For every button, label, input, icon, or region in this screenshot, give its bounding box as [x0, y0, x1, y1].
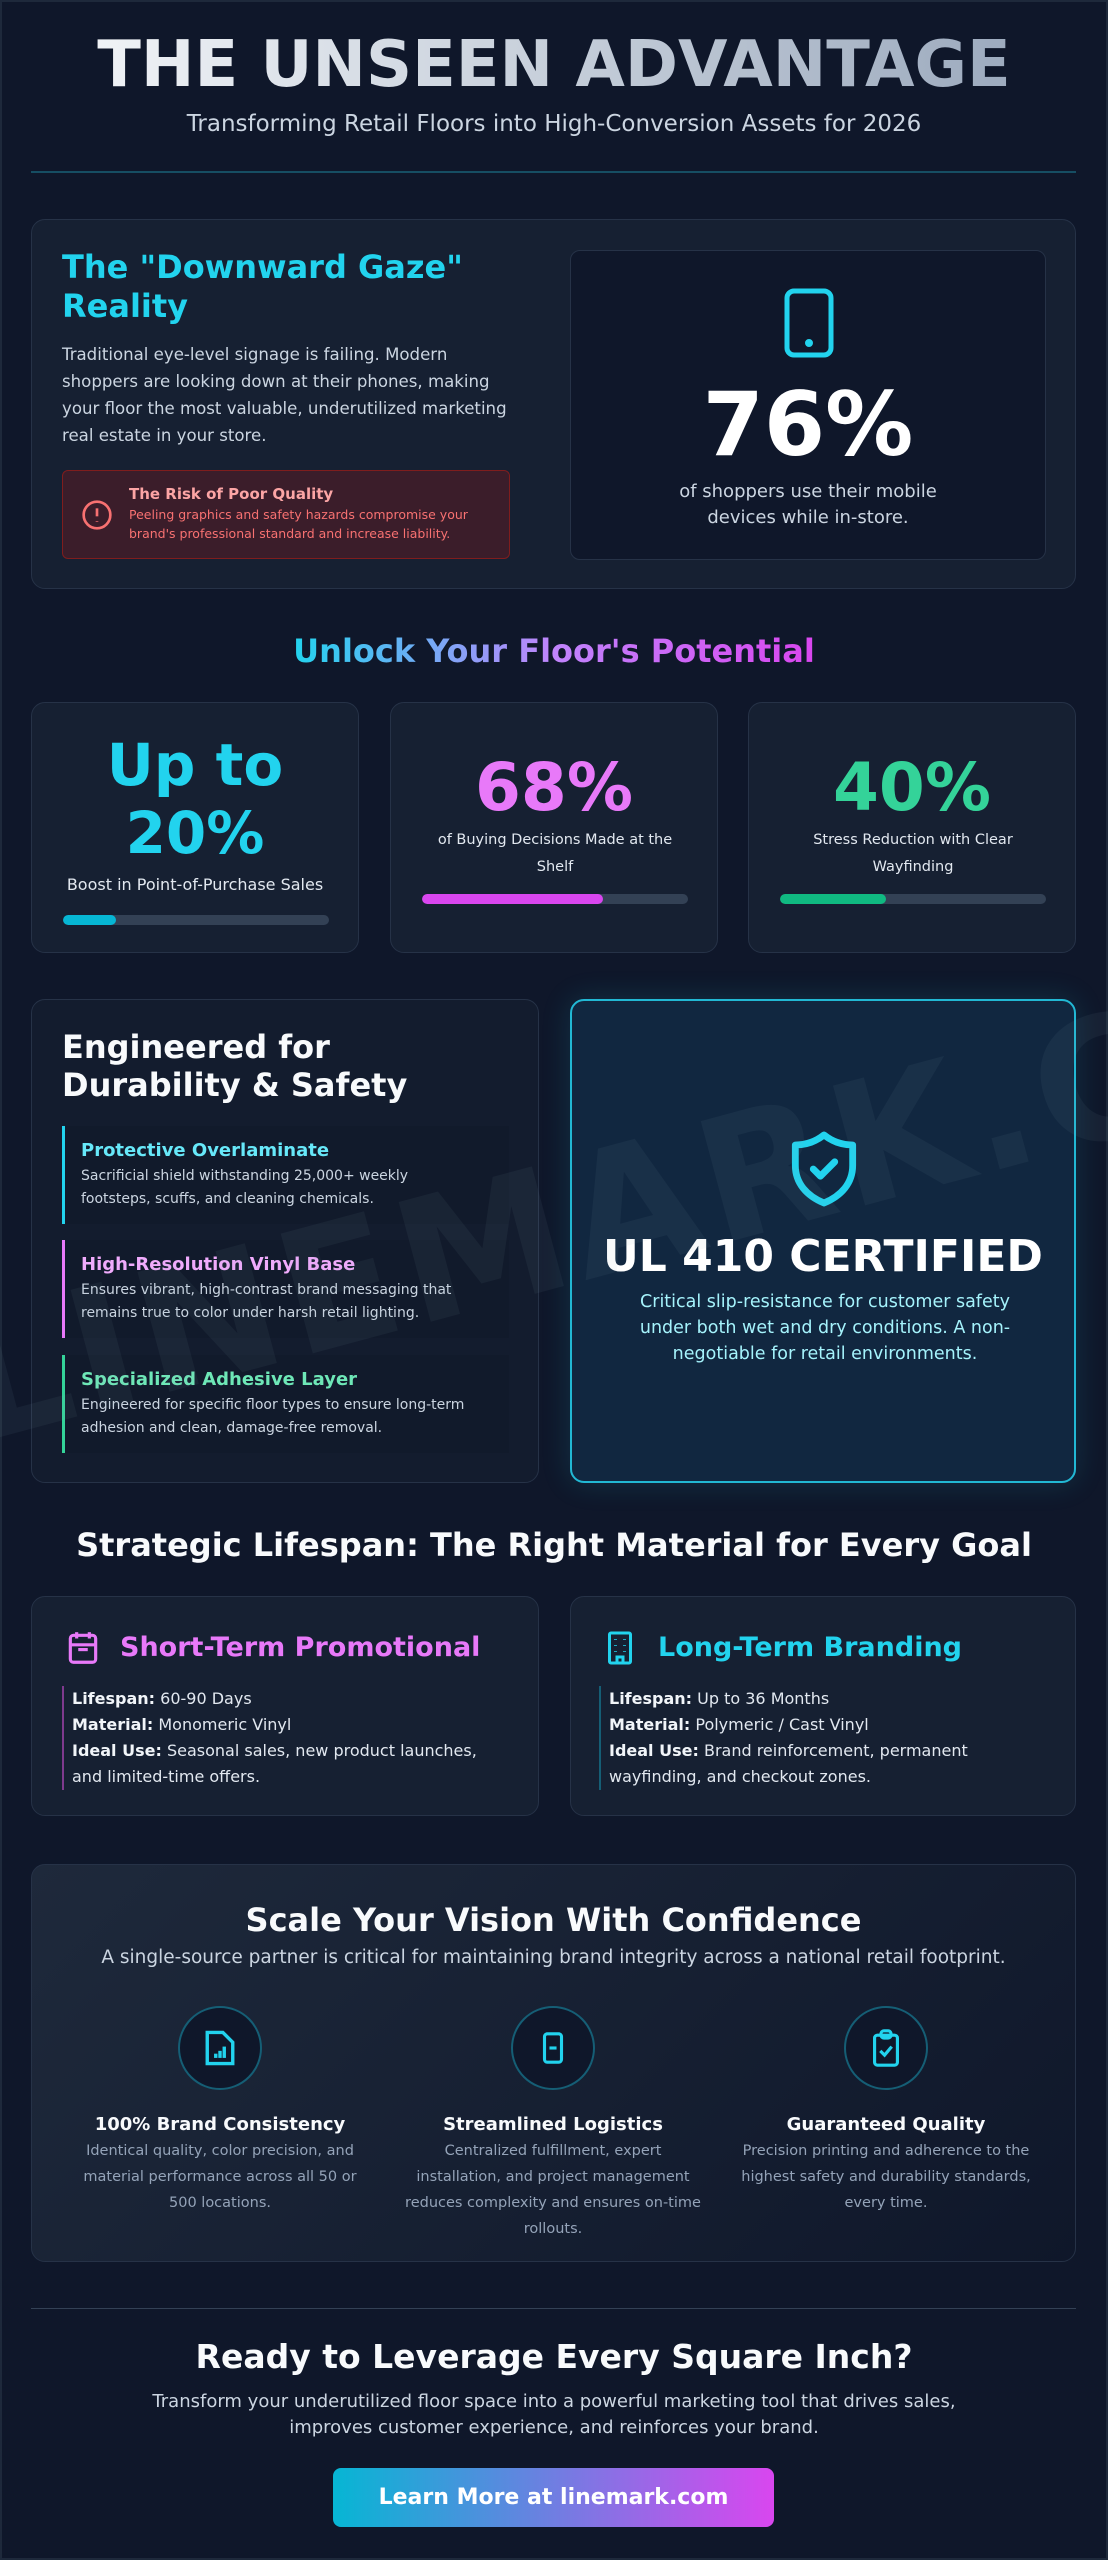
heading: downward gaze — [62, 248, 463, 325]
icon: file chart — [178, 2006, 262, 2090]
panel: downward gaze — [31, 219, 1076, 589]
heading: ready to leverage: Ready to Leverage Every Square Inch? — [196, 2337, 912, 2376]
icon: clipboard check — [844, 2006, 928, 2090]
details: short-term: Ideal Use: Seasonal sales, new product launches, and limited-time offers. — [72, 1741, 477, 1786]
stat card: 20%: 20% — [126, 799, 264, 867]
feature: brand consistency: 100% Brand Consistency — [95, 2114, 345, 2135]
title: THE UNSEEN ADVANTAGE — [97, 28, 1011, 102]
item: adhesive: Specialized Adhesive Layer — [81, 1369, 357, 1390]
text: UL 410 description: Critical slip-resistance for customer safety under both wet and dry conditions. A non-negotiable for retail environments. — [640, 1292, 1010, 1364]
item: vinyl base: Ensures vibrant, high-contrast brand messaging that remains true to color under harsh retail lighting. — [81, 1282, 451, 1321]
item: vinyl base: High-Resolution Vinyl Base — [81, 1254, 355, 1275]
heading: durability: Durability & Safety — [62, 1066, 407, 1104]
heading: durability: Engineered for — [62, 1028, 330, 1066]
heading: UL 410: UL 410 CERTIFIED — [603, 1231, 1043, 1282]
feature: guaranteed quality — [741, 2006, 1031, 2211]
stat card: 20%: Up to — [107, 731, 283, 799]
stat box: 76% — [570, 250, 1046, 560]
feature: logistics: Streamlined Logistics — [443, 2114, 663, 2135]
details: long-term: Lifespan: Up to 36 Months — [609, 1689, 829, 1708]
text: risk: The Risk of Poor Quality — [129, 485, 333, 503]
item: adhesive — [62, 1355, 509, 1453]
stat caption: devices while in-store. — [707, 507, 909, 528]
details: short-term: Lifespan: 60-90 Days — [72, 1689, 252, 1708]
panel: long-term — [570, 1596, 1076, 1816]
feature: brand consistency — [83, 2006, 357, 2211]
stat card: 40%: 40% — [833, 749, 991, 826]
panel: short-term — [31, 1596, 539, 1816]
text: scale subtitle: A single-source partner is critical for maintaining brand integrity across a national retail footprint. — [101, 1947, 1006, 1968]
callout: risk of poor quality — [62, 470, 510, 559]
heading: durability — [62, 1028, 407, 1104]
details: long-term — [599, 1686, 1029, 1790]
details: short-term: Material: Monomeric Vinyl — [72, 1715, 291, 1734]
feature: guaranteed quality: Precision printing and adherence to the highest safety and durability standards, every time. — [741, 2143, 1031, 2211]
text: downward gaze paragraph: Traditional eye-level signage is failing. Modern shoppers are looking down at their phones, making your floor the most valuable, underutilized marketing real estate in your store. — [62, 345, 507, 445]
stat caption: of shoppers use their mobile — [679, 481, 937, 502]
stat card: 20% — [31, 702, 359, 953]
subtitle: Transforming Retail Floors into High-Conversion Assets for 2026 — [187, 111, 921, 137]
item: vinyl base — [62, 1240, 509, 1338]
icon: shield — [792, 1132, 856, 1206]
icon: warning — [82, 500, 112, 530]
text: risk — [129, 485, 468, 541]
details: short-term — [62, 1686, 502, 1790]
heading: unlock potential: Unlock Your Floor's Potential — [293, 632, 815, 670]
stat card: 68% — [390, 702, 718, 953]
icon: building — [608, 1632, 632, 1664]
heading: strategic lifespan: Strategic Lifespan: The Right Material for Every Goal — [76, 1526, 1032, 1564]
details: long-term: Ideal Use: Brand reinforcement, permanent wayfinding, and checkout zones. — [609, 1741, 968, 1786]
panel: UL 410 certified — [570, 999, 1076, 1483]
text: risk: Peeling graphics and safety hazards compromise your brand's professional standard and increase liability. — [129, 507, 468, 541]
panel: durability — [31, 999, 539, 1483]
feature: guaranteed quality: Guaranteed Quality — [787, 2114, 985, 2135]
stat card: 40% — [748, 702, 1076, 953]
heading: short-term: Short-Term Promotional — [120, 1632, 480, 1663]
heading: downward gaze: Reality — [62, 287, 188, 325]
stat card: 40%: Stress Reduction with Clear Wayfinding — [813, 832, 1013, 875]
button: learn more — [333, 2468, 774, 2527]
panel: scale your vision — [31, 1864, 1076, 2262]
icon: phone — [784, 288, 834, 358]
stat card: 20%: Boost in Point-of-Purchase Sales — [67, 875, 323, 894]
item: adhesive: Engineered for specific floor types to ensure long-term adhesion and clean, damage-free removal. — [81, 1397, 464, 1436]
heading: downward gaze: The "Downward Gaze" — [62, 248, 463, 286]
stat card: 68%: of Buying Decisions Made at the Shelf — [438, 832, 672, 875]
feature: logistics — [405, 2006, 701, 2237]
icon: calendar — [68, 1632, 98, 1664]
item: overlaminate: Sacrificial shield withstanding 25,000+ weekly footsteps, scuffs, and cleaning chemicals. — [81, 1168, 408, 1207]
stat caption — [679, 481, 937, 528]
icon: device — [511, 2006, 595, 2090]
item: overlaminate: Protective Overlaminate — [81, 1140, 329, 1161]
feature: brand consistency: Identical quality, color precision, and material performance across all 50 or 500 locations. — [83, 2143, 357, 2211]
item: overlaminate — [62, 1126, 509, 1224]
stat card: 68%: 68% — [475, 749, 633, 826]
heading: scale: Scale Your Vision With Confidence — [246, 1901, 861, 1939]
text: cta description: Transform your underutilized floor space into a powerful marketing tool that drives sales, improves customer experience, and reinforces your brand. — [152, 2391, 956, 2438]
stat number: 76% — [703, 373, 913, 476]
details: long-term: Material: Polymeric / Cast Vinyl — [609, 1715, 869, 1734]
heading: long-term: Long-Term Branding — [658, 1632, 962, 1663]
feature: logistics: Centralized fulfillment, expert installation, and project management reduces complexity and ensures on-time rollouts. — [405, 2143, 701, 2237]
button: learn more: Learn More at linemark.com — [379, 2485, 728, 2510]
